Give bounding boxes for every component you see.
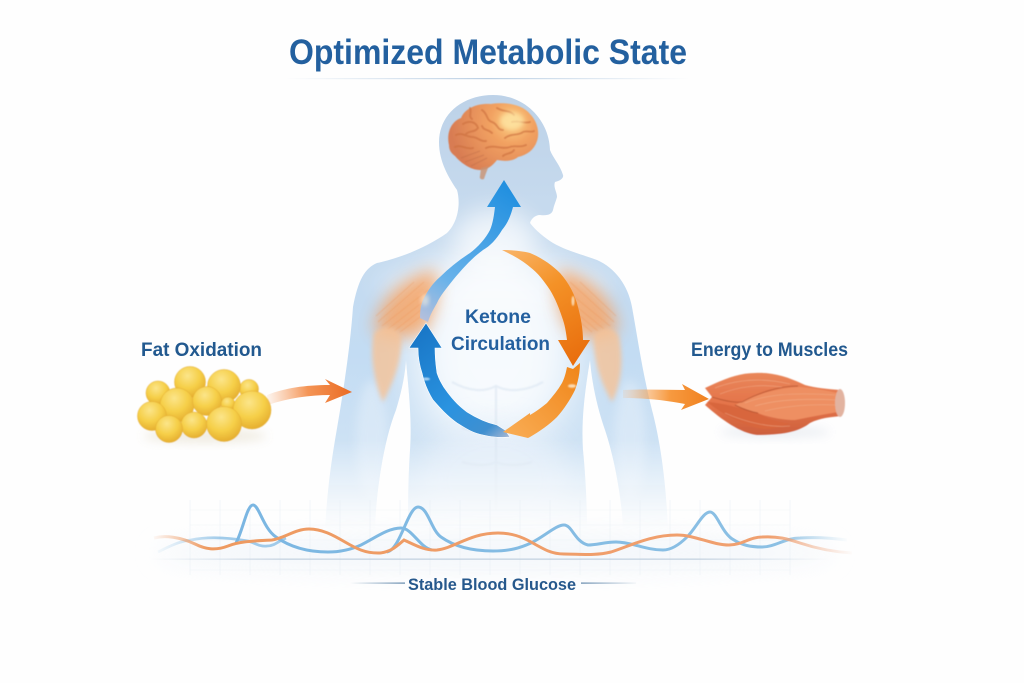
label: stable blood glucose: Stable Blood Glucose [408, 576, 576, 594]
arrow: blue rising to brain [420, 180, 521, 322]
icon: fat cells [138, 366, 271, 443]
title: Optimized Metabolic State [289, 33, 687, 72]
arrow: fat to body [267, 379, 352, 405]
infographic canvas [136, 38, 850, 590]
arrow: blue lower left arc [409, 323, 510, 437]
label: fat oxidation: Fat Oxidation [141, 339, 262, 361]
chart: stable blood glucose [150, 500, 852, 575]
icon: brain [448, 103, 538, 179]
arrow: orange lower right arc [503, 363, 580, 438]
human body silhouette [325, 95, 668, 540]
icon: muscle [705, 373, 845, 438]
circulation sparkles [421, 294, 576, 388]
label: ketone circulation [451, 307, 550, 355]
arrow: body to muscle [623, 384, 709, 410]
right shoulder muscle [557, 270, 621, 402]
label: energy to muscles: Energy to Muscles [691, 339, 848, 361]
label: ketone circulation: Ketone [465, 307, 531, 328]
left shoulder muscle [372, 270, 437, 402]
arrow: orange upper right arc [502, 250, 590, 366]
label: ketone circulation: Circulation [451, 334, 550, 355]
abdominal definition [452, 382, 543, 430]
